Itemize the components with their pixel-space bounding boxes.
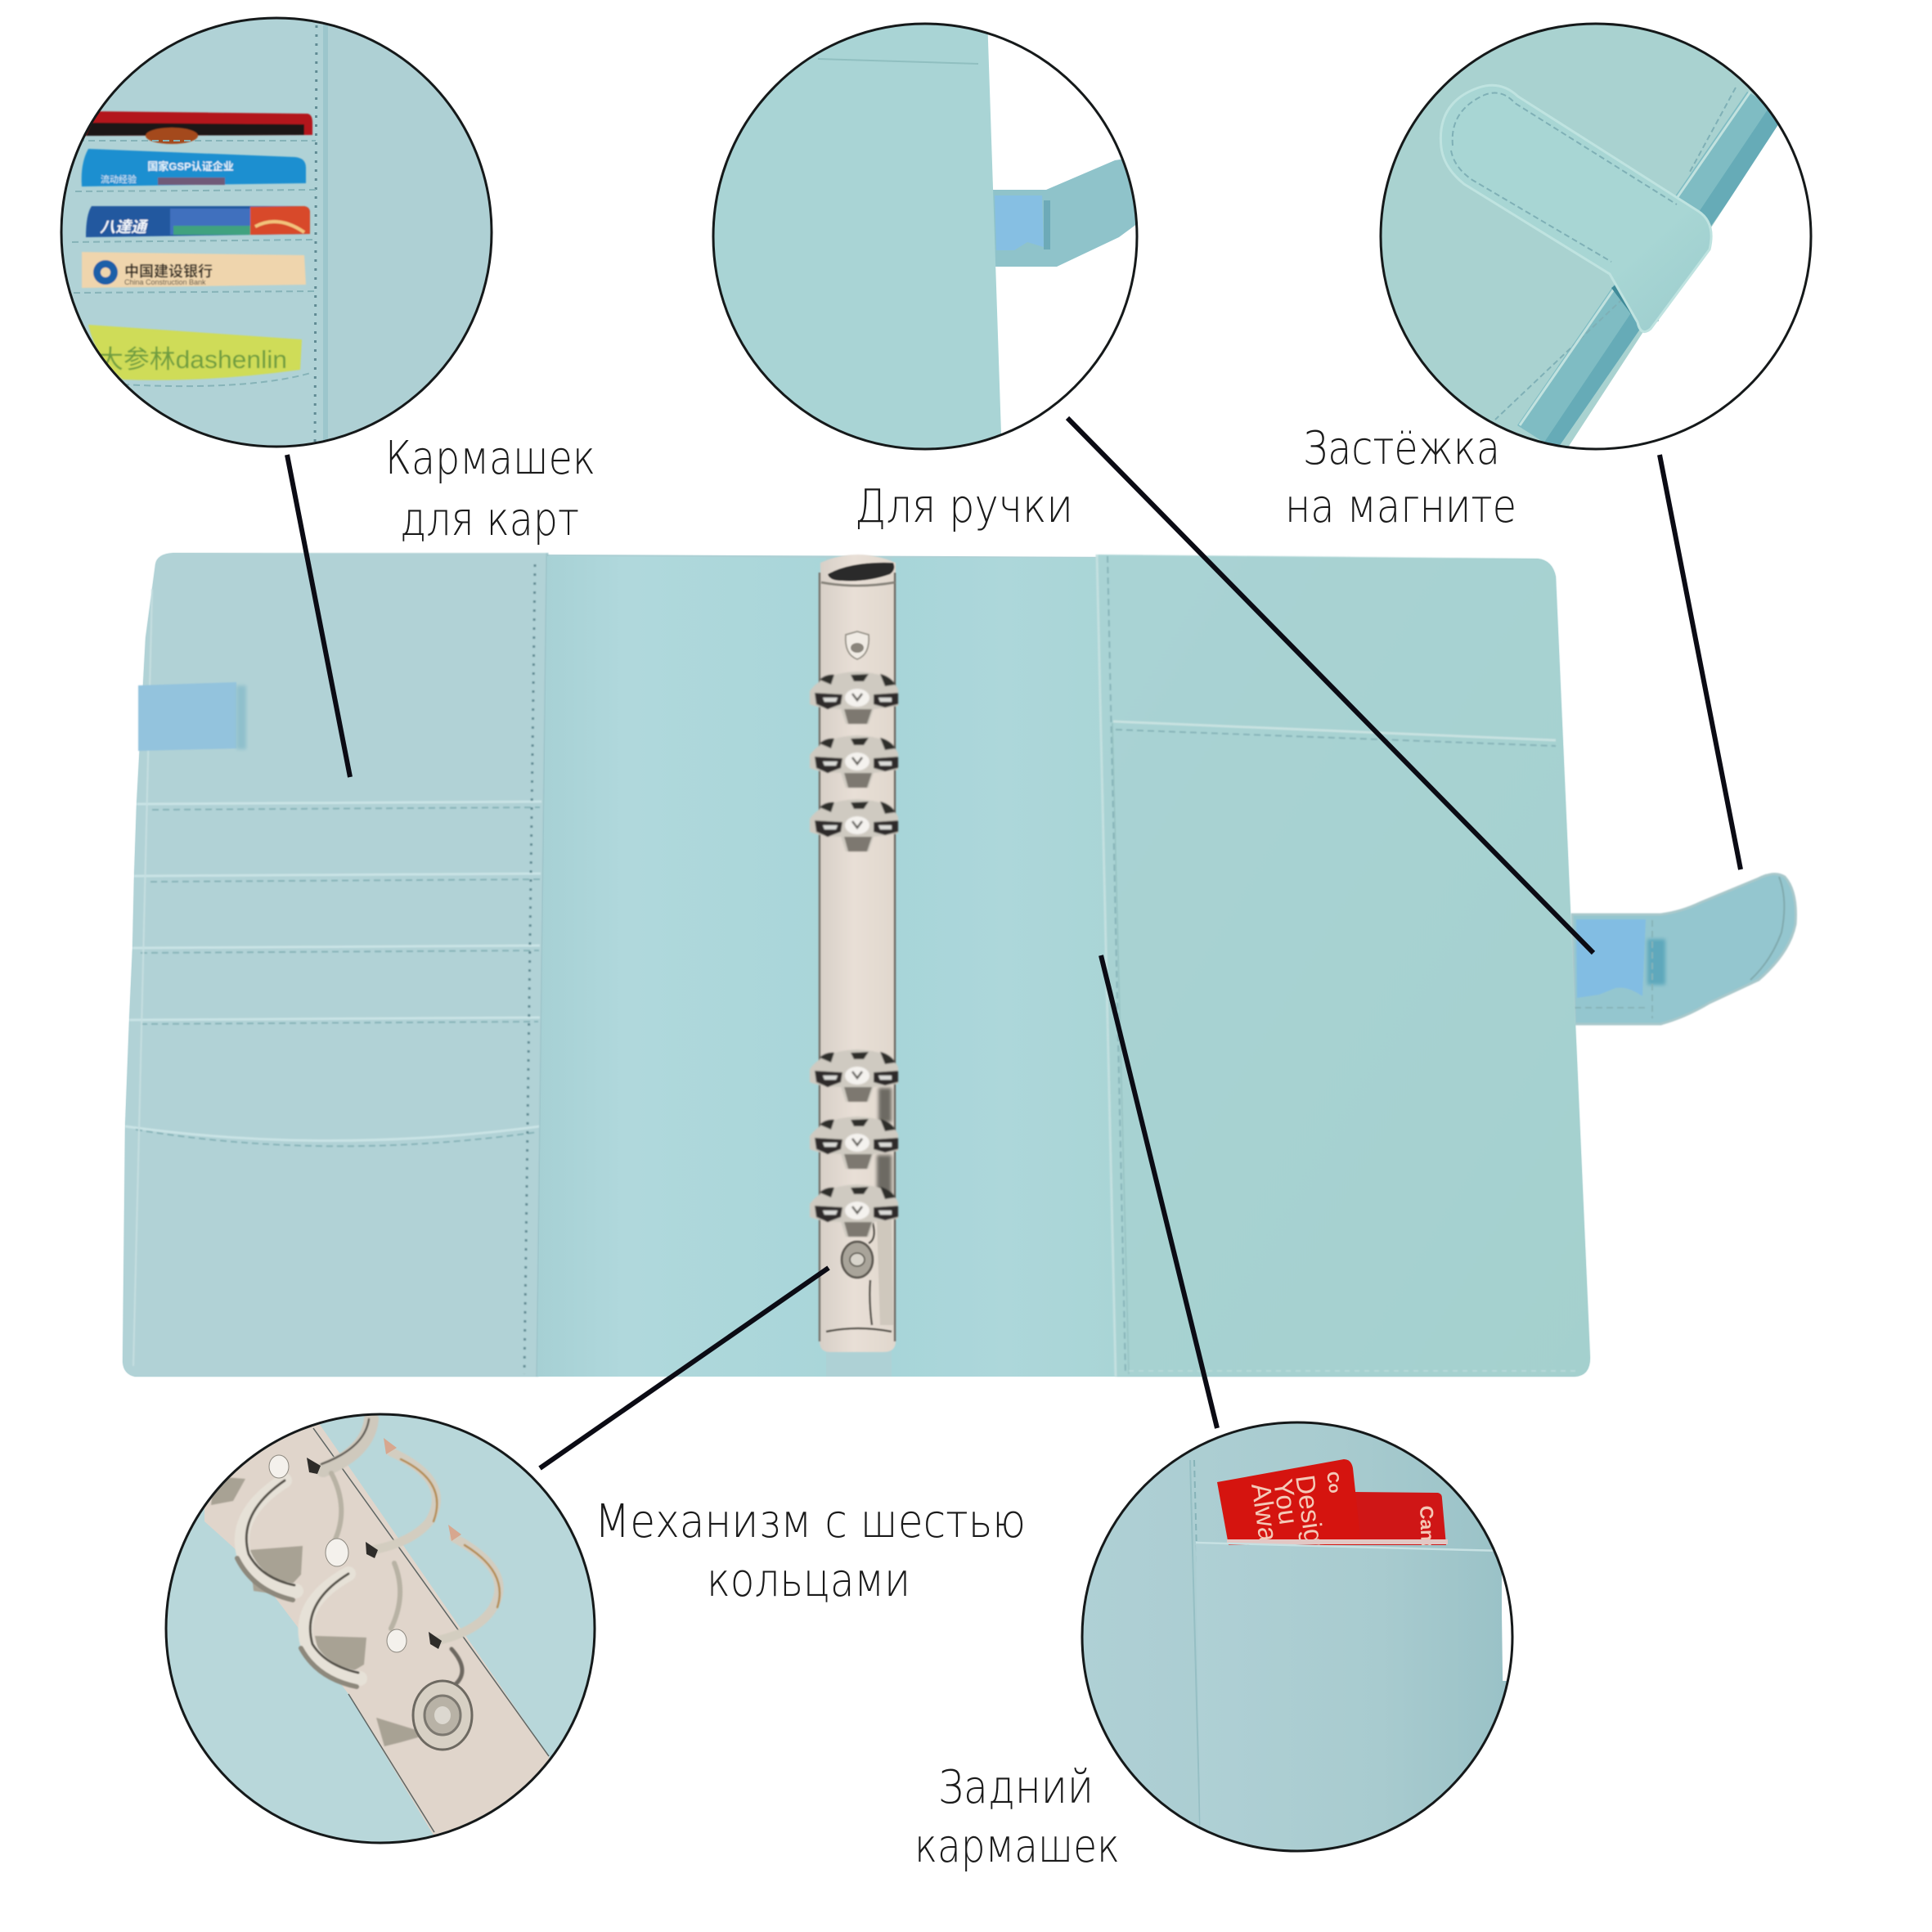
callout circle: back pocket (1082, 1422, 1514, 1857)
red card (82, 111, 312, 144)
ring tips (384, 1438, 461, 1541)
bank card: China Construction Bank (124, 278, 206, 286)
rings (237, 1419, 500, 1687)
red card front (1217, 1459, 1361, 1570)
binder base (123, 553, 1590, 1377)
centre right panel (892, 558, 1116, 1377)
plate cut-outs (211, 1476, 429, 1746)
callout circle: pen holder (703, 16, 1145, 458)
rings (810, 672, 898, 1237)
cover edge (703, 16, 1002, 458)
lower plate shading (877, 1088, 892, 1196)
label: card pocket (385, 432, 595, 546)
blue card (82, 149, 306, 186)
pocket (1196, 1544, 1505, 1857)
red card front: Co (1323, 1471, 1344, 1494)
label: back pocket: кармашек (914, 1820, 1120, 1873)
seam (1190, 1460, 1200, 1826)
right clasp tab (1572, 874, 1795, 1024)
shadow under strap (1611, 285, 1659, 322)
metal plate (204, 1425, 550, 1835)
red card front: Design (1290, 1473, 1332, 1561)
label: card pocket: Кармашек (385, 432, 595, 485)
label: pen holder: Для ручки (855, 480, 1073, 533)
card slots (125, 802, 541, 1146)
leader line: card pocket (287, 455, 350, 777)
callout circle: magnetic clasp (1381, 24, 1832, 466)
bank card: 中国建设银行 (124, 263, 213, 280)
loop (995, 195, 1044, 250)
label: back pocket: Задний (938, 1761, 1094, 1814)
label: magnetic clasp: на магните (1285, 480, 1516, 533)
pen loop (1576, 919, 1646, 998)
red card front: You (1268, 1477, 1304, 1526)
bottom rivet (842, 1242, 873, 1278)
pen holder band (138, 682, 236, 751)
right panel (1097, 555, 1590, 1377)
transit card (86, 206, 310, 237)
small rivets (269, 1455, 407, 1652)
centre left panel (537, 556, 826, 1377)
top slot (828, 563, 894, 581)
label: magnetic clasp (1285, 422, 1516, 533)
loyalty card (88, 325, 302, 380)
label: ring mechanism: Механизм с шестью (595, 1495, 1026, 1548)
leader line: pen holder (1067, 418, 1593, 953)
main rivet (413, 1681, 472, 1750)
white outside (1569, 125, 1809, 448)
label: back pocket (914, 1761, 1120, 1873)
left panel (123, 553, 547, 1377)
loyalty card: 大参林dashenlin (97, 345, 287, 374)
label: magnetic clasp: Застёжка (1303, 422, 1500, 475)
red card back (1353, 1492, 1446, 1565)
label: ring mechanism: кольцами (707, 1554, 910, 1607)
blue card: 国家GSP认证企业 (147, 160, 234, 173)
red card front: Always (1246, 1481, 1287, 1570)
leader line: back pocket (1101, 955, 1217, 1428)
transit card: 八達通 (100, 218, 149, 236)
seam (315, 16, 317, 450)
label: card pocket: для карт (400, 493, 579, 546)
leader line: magnetic clasp (1660, 455, 1741, 869)
red card back: Canon (1416, 1505, 1439, 1565)
back pocket (1113, 721, 1556, 740)
leader line: ring mechanism (540, 1268, 829, 1468)
bank card (82, 252, 306, 288)
callout circle: card pocket (61, 16, 500, 450)
top rivet (846, 631, 869, 659)
page edge band (1517, 92, 1779, 448)
strap (1440, 85, 1711, 332)
label: ring mechanism (595, 1495, 1026, 1607)
binder photo (123, 553, 1795, 1377)
callout circle: ring mechanism (166, 1407, 595, 1881)
ring mechanism spine (810, 555, 898, 1352)
blue card: 流动经验 (101, 173, 137, 185)
clasp strap (993, 159, 1135, 267)
ring clips (307, 1458, 442, 1649)
